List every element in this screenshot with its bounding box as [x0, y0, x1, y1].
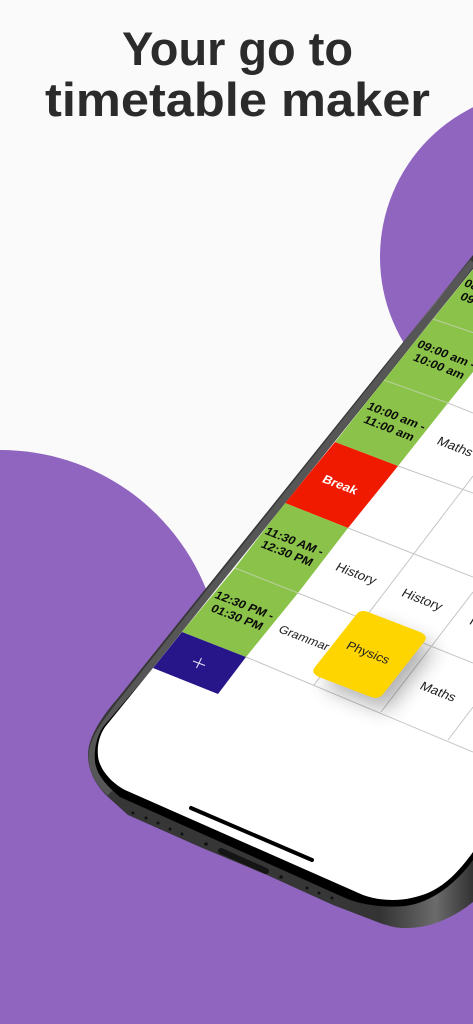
time labels: 11:30 AM - — [262, 524, 327, 558]
subject labels: Grammar — [276, 623, 332, 653]
purple blob lower left — [0, 450, 473, 1024]
grid lines — [246, 403, 473, 752]
dragged physics card: Physics — [344, 639, 392, 667]
title — [45, 22, 430, 126]
subject labels: History — [399, 586, 446, 613]
break label: Break — [320, 473, 361, 498]
subject labels: History — [333, 560, 380, 587]
timetable on screen — [153, 257, 473, 752]
time column cells — [153, 257, 473, 694]
black screen bezel — [95, 672, 473, 907]
home indicator — [191, 808, 312, 860]
time labels — [205, 277, 473, 634]
dragged physics card — [313, 611, 426, 698]
time labels: 01:30 PM — [208, 602, 266, 633]
time labels: 12:30 PM - — [212, 588, 277, 622]
title: timetable maker — [45, 73, 430, 126]
add row plus icon — [193, 658, 205, 668]
speaker and port details — [132, 812, 334, 900]
time labels: 12:30 PM — [258, 538, 316, 569]
metal rim left edge — [92, 262, 473, 793]
time labels: 10:00 am - — [365, 400, 429, 433]
time labels: 10:00 am — [411, 351, 468, 382]
time labels: 11:00 am — [361, 413, 417, 444]
screen — [98, 269, 473, 900]
dragged card shadow — [323, 622, 436, 711]
purple circle top right — [380, 90, 473, 424]
subject labels — [276, 434, 473, 704]
title: Your go to — [122, 22, 353, 75]
subject labels: Maths — [417, 679, 460, 704]
phone body — [88, 255, 473, 928]
phone mockup — [88, 255, 473, 928]
